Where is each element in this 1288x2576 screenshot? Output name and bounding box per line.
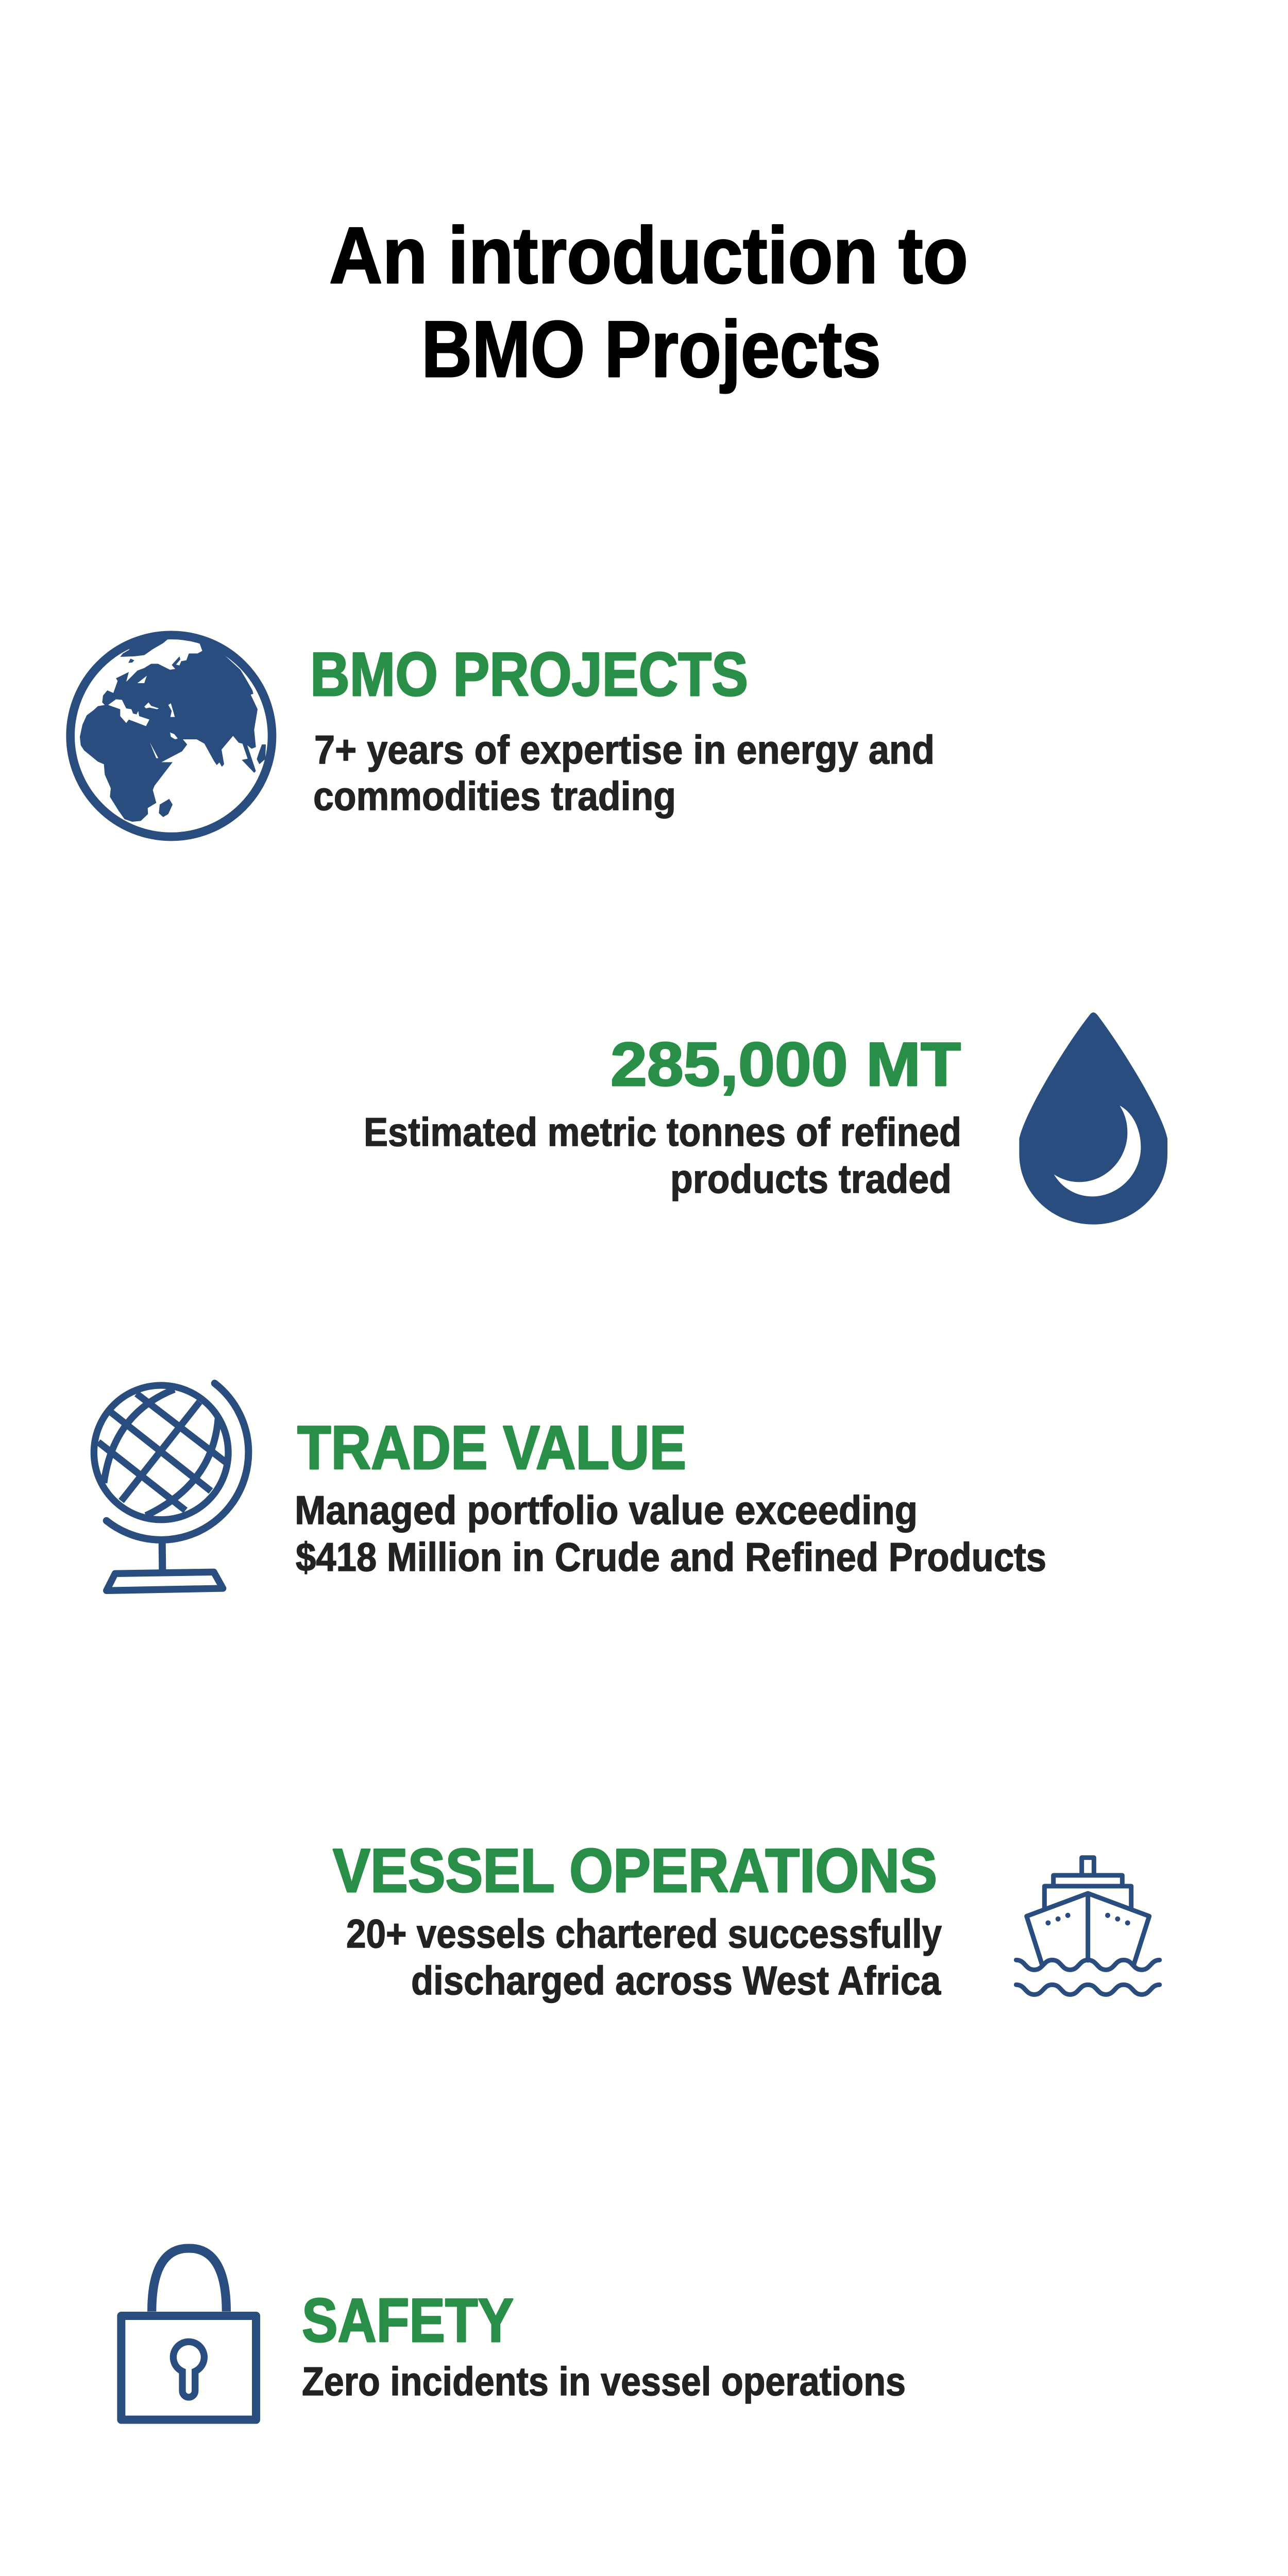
- panel: BMO Projects: [71, 635, 935, 837]
- panel: 285,000 MT: [364, 1012, 1167, 1225]
- heading: TRADE VALUE: [297, 1413, 686, 1482]
- text block: Managed portfolio value exceeding: [295, 1487, 918, 1533]
- heading: SAFETY: [302, 2286, 514, 2355]
- text block: discharged across West Africa: [411, 1958, 941, 2003]
- heading: VESSEL OPERATIONS: [333, 1836, 937, 1905]
- icon: padlock: [121, 2248, 256, 2420]
- text block: Estimated metric tonnes of refined: [364, 1109, 961, 1155]
- icon: oil drop: [1019, 1012, 1167, 1225]
- icon: ship: [1016, 1858, 1160, 1994]
- title: BMO Projects: [421, 304, 881, 394]
- icon: desk globe: [94, 1383, 248, 1590]
- text block: [313, 727, 935, 819]
- panel: vessel operations: [333, 1836, 1160, 2003]
- title: An introduction to: [329, 211, 968, 300]
- heading: 285,000 MT: [611, 1030, 961, 1099]
- text block: [364, 1109, 961, 1201]
- heading: BMO PROJECTS: [310, 640, 748, 709]
- text block: [295, 1487, 1046, 1580]
- text block: $418 Million in Crude and Refined Products: [296, 1534, 1046, 1580]
- icon: earth globe: [71, 635, 272, 837]
- text block: 7+ years of expertise in energy and: [314, 727, 935, 772]
- panel: safety: [121, 2248, 906, 2420]
- panel: trade value: [94, 1383, 1046, 1590]
- text block: [346, 1911, 942, 2003]
- text block: products traded: [670, 1156, 952, 1201]
- title: [329, 211, 968, 394]
- text block: 20+ vessels chartered successfully: [346, 1911, 942, 1956]
- text block: Zero incidents in vessel operations: [302, 2359, 906, 2404]
- text block: commodities trading: [313, 773, 676, 819]
